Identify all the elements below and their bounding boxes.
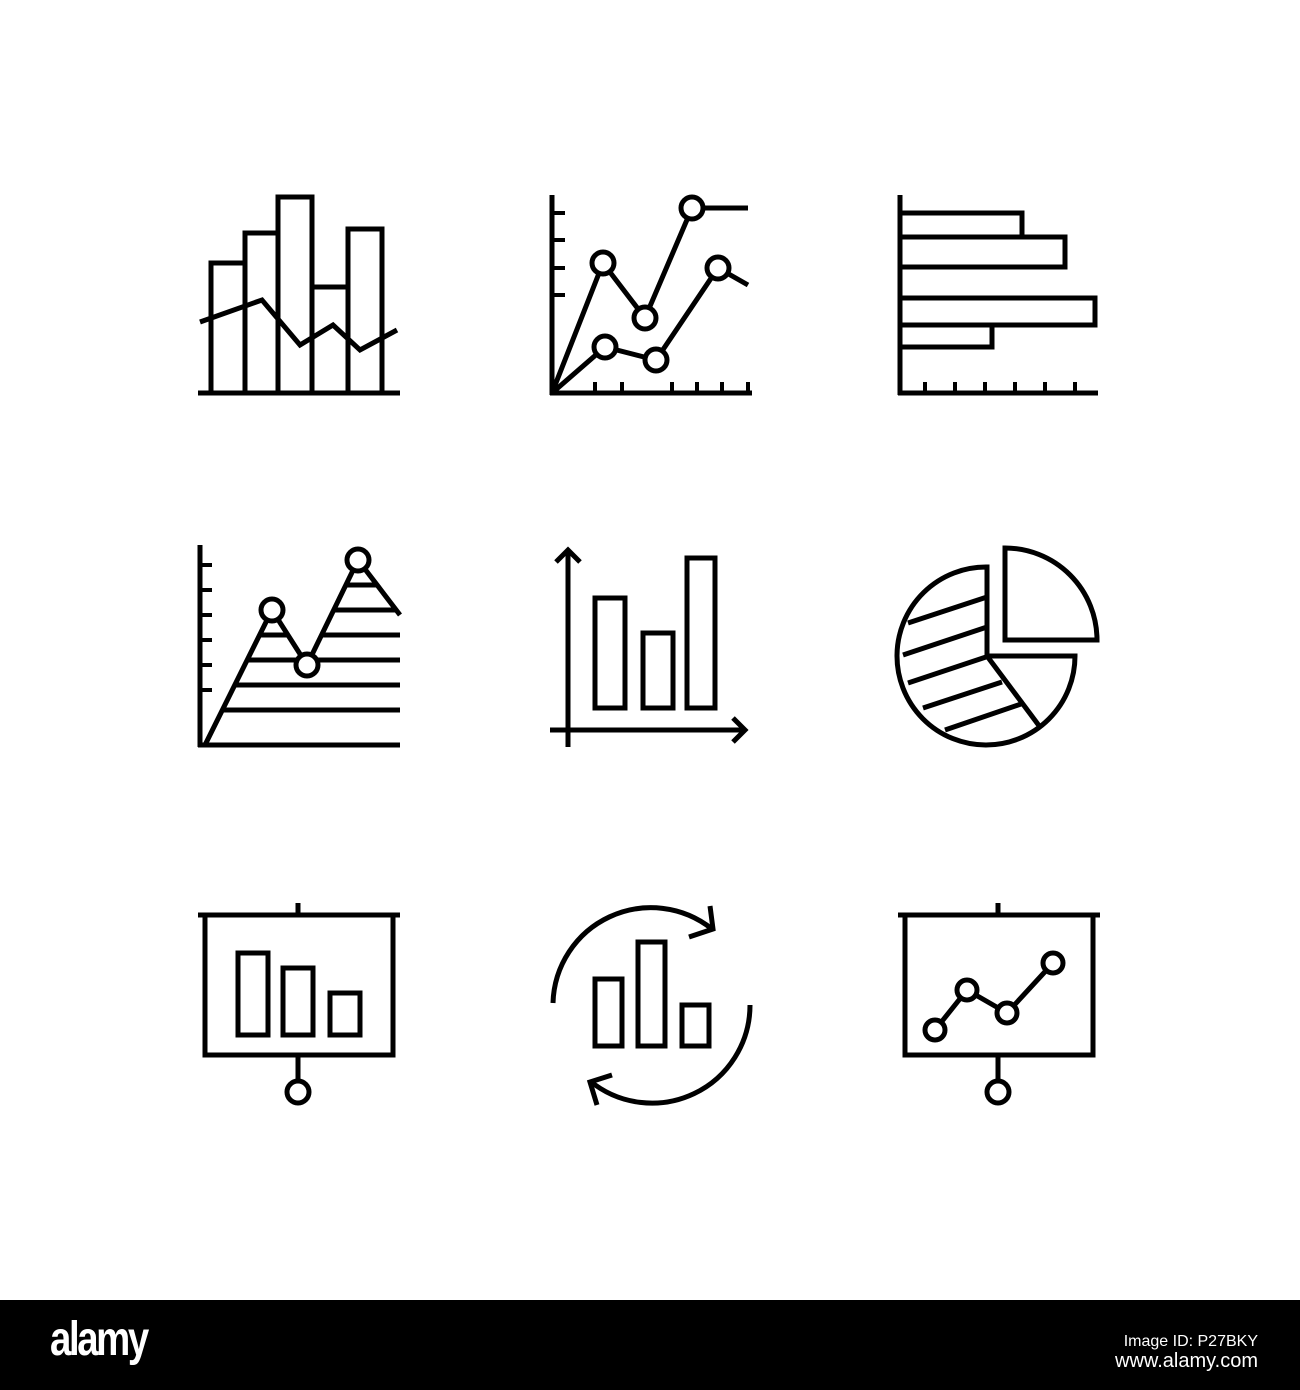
website: www.alamy.com [1115, 1350, 1258, 1372]
icon: area chart [198, 545, 400, 747]
icon: presentation line chart [898, 903, 1100, 1103]
logo: alamy [50, 1313, 147, 1366]
footer banner [0, 1300, 1300, 1390]
icon: bar chart with arrows [550, 550, 745, 747]
icon: pie chart [897, 548, 1097, 745]
icon: bar chart with line [198, 197, 400, 393]
icon: dual line chart [550, 195, 752, 395]
icon grid [198, 194, 1100, 1106]
image id: Image ID: P27BKY [1124, 1333, 1258, 1350]
icon: presentation bar chart [198, 903, 400, 1103]
icon: horizontal bar chart [898, 195, 1098, 395]
icon: refresh bar chart [553, 906, 750, 1105]
